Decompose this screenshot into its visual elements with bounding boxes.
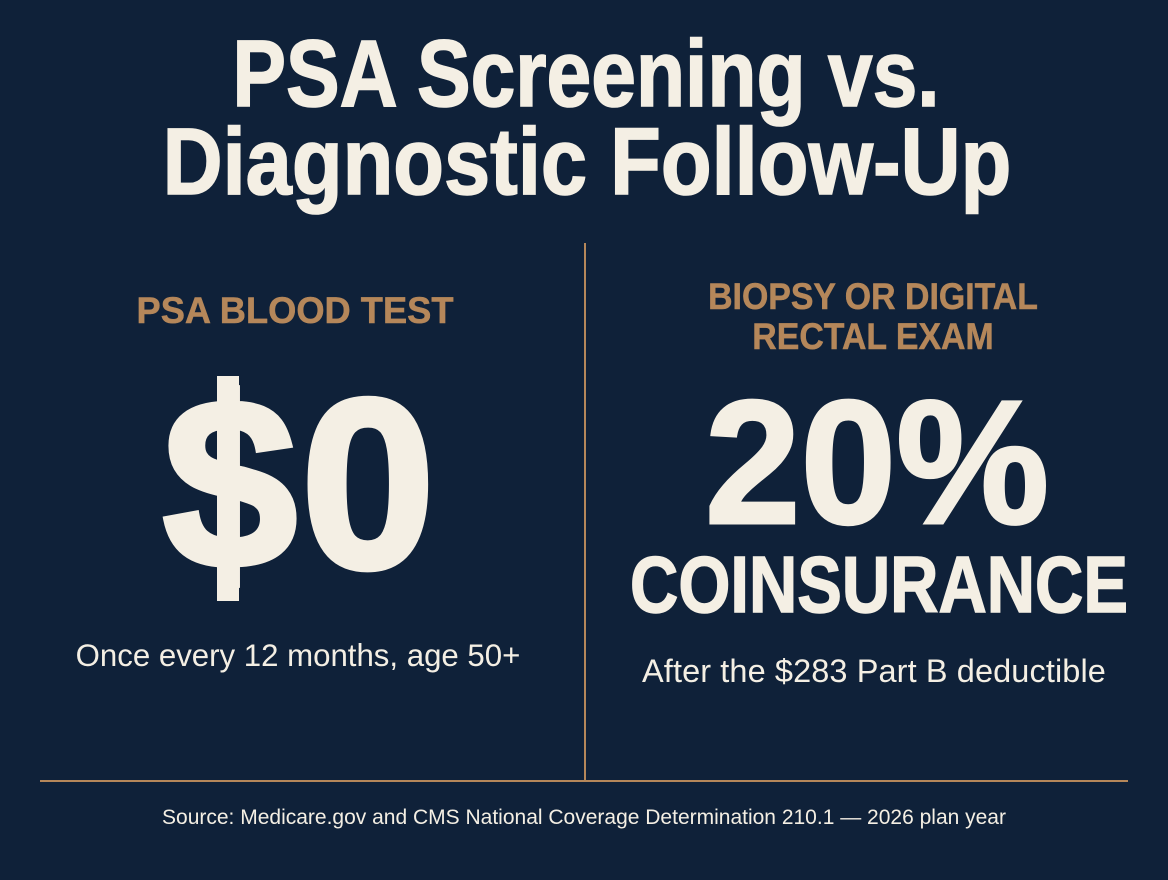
title: Diagnostic Follow-Up [163,109,1011,215]
vertical divider [584,243,586,780]
left panel heading: PSA BLOOD TEST [137,290,453,331]
right panel heading [708,276,1038,357]
title: PSA Screening vs. [232,21,940,127]
title [163,21,1011,215]
right panel heading: RECTAL EXAM [752,316,994,357]
right panel heading: BIOPSY OR DIGITAL [708,276,1038,317]
panel: biopsy or digital rectal exam [630,276,1128,689]
left panel value: $0: $0 [163,350,439,619]
right panel value: 20%: 20% [705,365,1049,561]
left panel caption: Once every 12 months, age 50+ [76,638,520,673]
source note: Source: Medicare.gov and CMS National Coverage Determination 210.1 — 2026 plan year [162,806,1006,829]
right panel value label: coinsurance: COINSURANCE [630,540,1128,629]
right panel caption: After the $283 Part B deductible [642,653,1106,689]
panel: PSA blood test [76,290,520,673]
horizontal divider [40,780,1128,782]
